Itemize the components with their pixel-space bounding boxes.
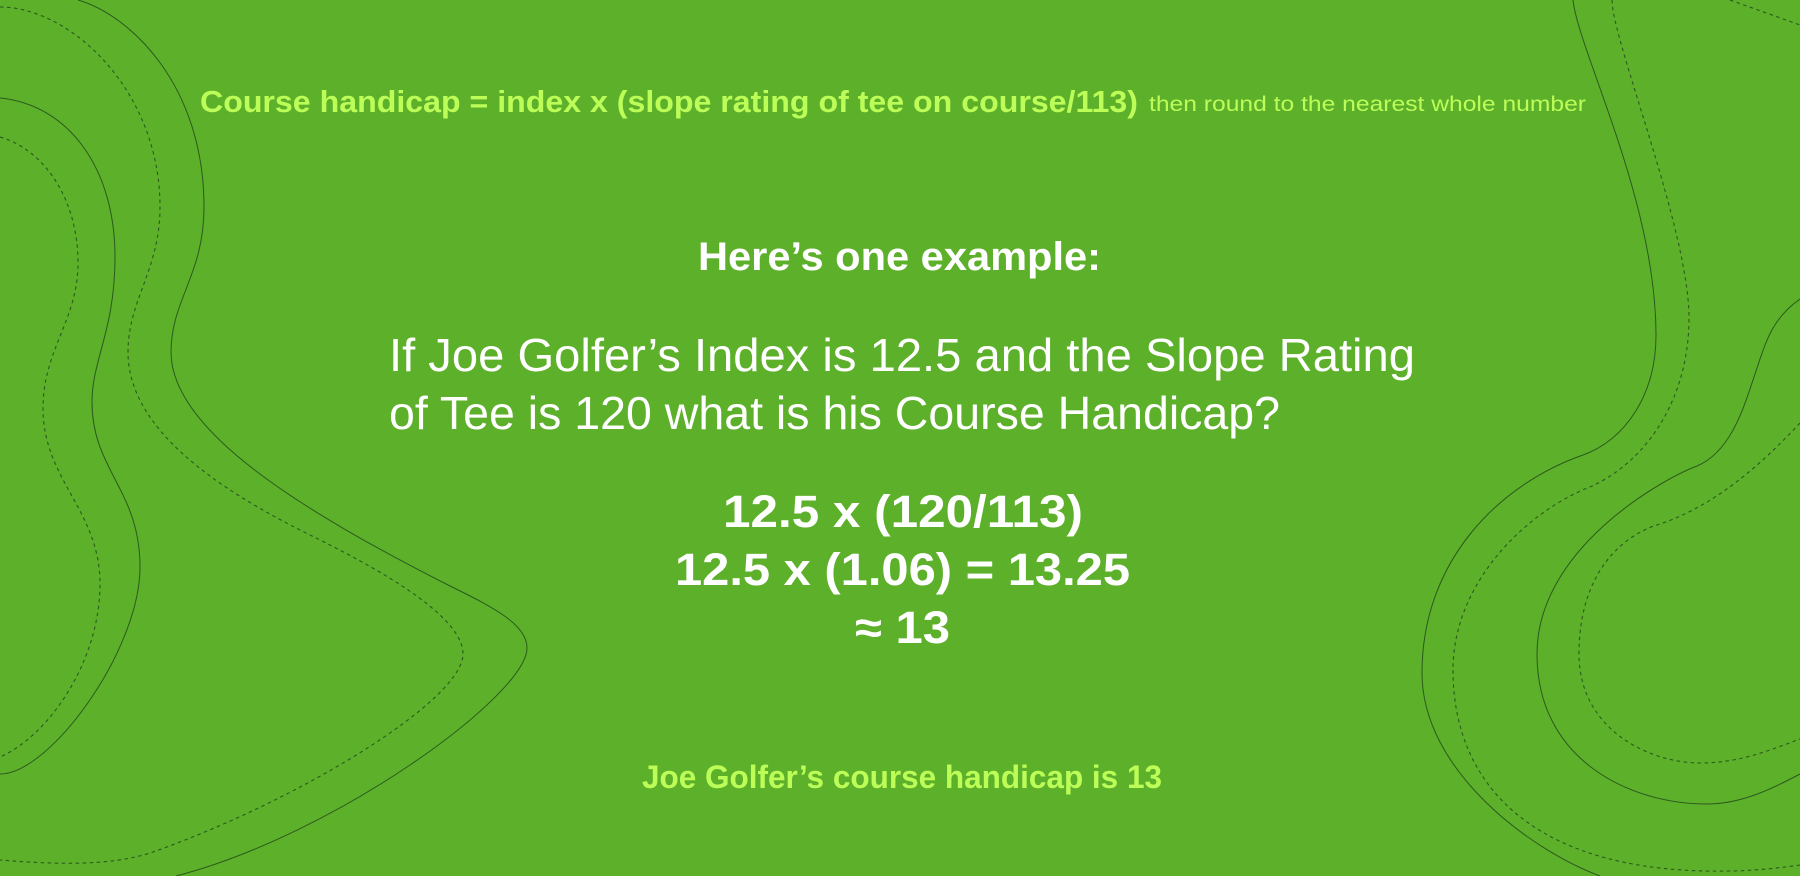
- conclusion: Joe Golfer’s course handicap is 13: [642, 759, 1162, 795]
- formula heading: [200, 84, 1586, 119]
- formula heading: then round to the nearest whole number: [1149, 93, 1586, 116]
- calculation steps: 12.5 x (1.06) = 13.25: [675, 544, 1130, 595]
- example heading: Here’s one example:: [698, 235, 1101, 279]
- question text: If Joe Golfer’s Index is 12.5 and the Slope Rating: [389, 329, 1415, 381]
- calculation steps: 12.5 x (120/113): [723, 486, 1083, 537]
- question text: of Tee is 120 what is his Course Handicap?: [389, 387, 1280, 439]
- contour lines: left: [0, 0, 527, 876]
- formula heading: Course handicap = index x (slope rating of tee on course/113): [200, 84, 1138, 119]
- calculation steps: ≈ 13: [855, 602, 950, 653]
- question text: [389, 329, 1415, 439]
- contour lines: right: [1422, 0, 1800, 876]
- calculation steps: [675, 486, 1130, 653]
